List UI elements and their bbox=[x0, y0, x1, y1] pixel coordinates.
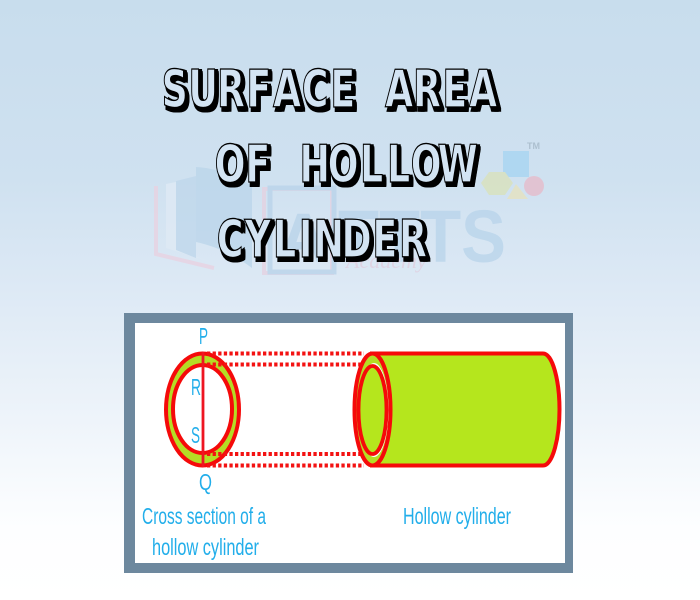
title: O bbox=[215, 135, 246, 195]
dotted projection lines bbox=[207, 354, 364, 466]
title: E bbox=[443, 60, 467, 120]
title: A bbox=[273, 60, 301, 120]
title: H bbox=[299, 135, 330, 195]
cross section of hollow cylinder bbox=[166, 352, 239, 467]
watermark logo: A bbox=[278, 199, 329, 277]
title: W bbox=[437, 135, 478, 195]
title: D bbox=[342, 210, 372, 270]
title: U bbox=[188, 60, 218, 120]
hollow cylinder bbox=[354, 354, 560, 466]
title: F bbox=[246, 135, 270, 195]
title: O bbox=[411, 135, 442, 195]
title: O bbox=[328, 135, 359, 195]
labels: Hollow cylinder bbox=[403, 503, 511, 529]
panel frame bbox=[124, 313, 573, 573]
title: S bbox=[162, 60, 188, 120]
watermark logo: Academy bbox=[344, 248, 427, 273]
title: A bbox=[385, 60, 413, 120]
labels: R bbox=[191, 374, 201, 400]
title: N bbox=[314, 210, 344, 270]
title: F bbox=[247, 60, 271, 120]
labels: P bbox=[199, 323, 208, 349]
title: I bbox=[299, 210, 313, 270]
title: E bbox=[331, 60, 355, 120]
watermark logo: TTTS bbox=[338, 195, 506, 278]
labels: hollow cylinder bbox=[152, 534, 259, 560]
title: Y bbox=[245, 210, 271, 270]
title: L bbox=[273, 210, 296, 270]
title: R bbox=[399, 210, 427, 270]
title: R bbox=[413, 60, 441, 120]
title: L bbox=[360, 135, 383, 195]
labels: S bbox=[191, 422, 200, 448]
title: C bbox=[302, 60, 328, 120]
title: R bbox=[217, 60, 245, 120]
title: A bbox=[469, 60, 497, 120]
watermark logo: TM bbox=[527, 141, 540, 151]
watermark logo bbox=[154, 141, 544, 278]
labels: Cross section of a bbox=[142, 503, 266, 529]
title: C bbox=[217, 210, 243, 270]
panel: hollow cylinder diagram bbox=[124, 313, 573, 573]
labels: Q bbox=[199, 469, 212, 495]
labels bbox=[142, 323, 511, 560]
title: L bbox=[387, 135, 410, 195]
title: E bbox=[373, 210, 397, 270]
title bbox=[162, 60, 502, 270]
